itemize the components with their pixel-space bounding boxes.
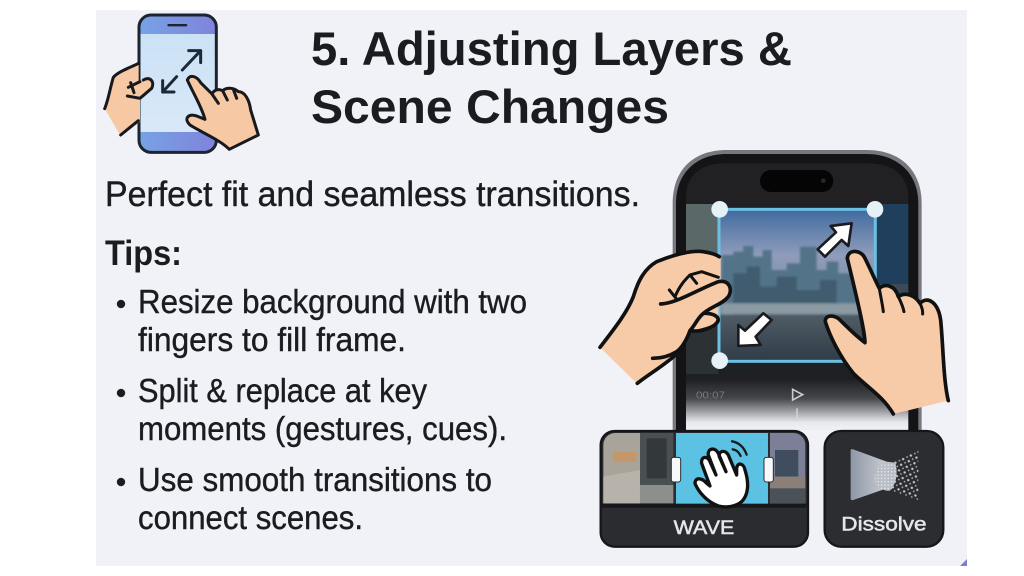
- label: WAVE: WAVE: [674, 518, 734, 539]
- corner mark: [960, 559, 967, 566]
- tip 1: [117, 283, 527, 358]
- icon resize arrows: [163, 51, 201, 92]
- tip 1: Resize background with two: [138, 283, 527, 320]
- illustration: large phone with resize gesture: [600, 150, 948, 430]
- dissolve card: [825, 431, 943, 547]
- icon right hand: [187, 76, 258, 149]
- phone body: [673, 150, 922, 430]
- tip 2: [117, 372, 507, 447]
- playback bar: 00:07: [696, 391, 725, 402]
- tips list: [117, 283, 527, 536]
- arrow: shrink down left: [738, 313, 772, 346]
- tip 1: fingers to fill frame.: [138, 321, 406, 358]
- video frame: [686, 204, 908, 377]
- left hand: [600, 251, 732, 383]
- icon: waving hand: [695, 441, 748, 507]
- selection handles: [711, 201, 883, 369]
- title: Scene Changes: [311, 80, 669, 133]
- tip 3: [117, 461, 492, 536]
- tip 3: connect scenes.: [138, 499, 363, 536]
- title: [311, 22, 792, 133]
- transition timeline: [601, 431, 943, 547]
- camera island: [760, 170, 833, 192]
- right hand: [825, 251, 948, 414]
- tips heading: Tips:: [105, 234, 182, 273]
- icon: phone with pinch gesture: [105, 15, 258, 152]
- tip 3: Use smooth transitions to: [138, 461, 492, 498]
- city skyline: [722, 246, 868, 315]
- icon left hand: [105, 63, 153, 136]
- dissolve card: Dissolve: [841, 515, 927, 536]
- playback bar: [686, 377, 908, 430]
- arrow: expand up right: [818, 223, 852, 257]
- tip 2: moments (gestures, cues).: [138, 410, 507, 447]
- title: 5. Adjusting Layers &: [311, 22, 792, 75]
- timeline card: [601, 431, 808, 547]
- subtitle: Perfect fit and seamless transitions.: [105, 175, 640, 214]
- tip 2: Split & replace at key: [138, 372, 427, 409]
- clip handles: [671, 457, 773, 482]
- icon phone body: [139, 15, 216, 152]
- selection frame: [719, 209, 875, 361]
